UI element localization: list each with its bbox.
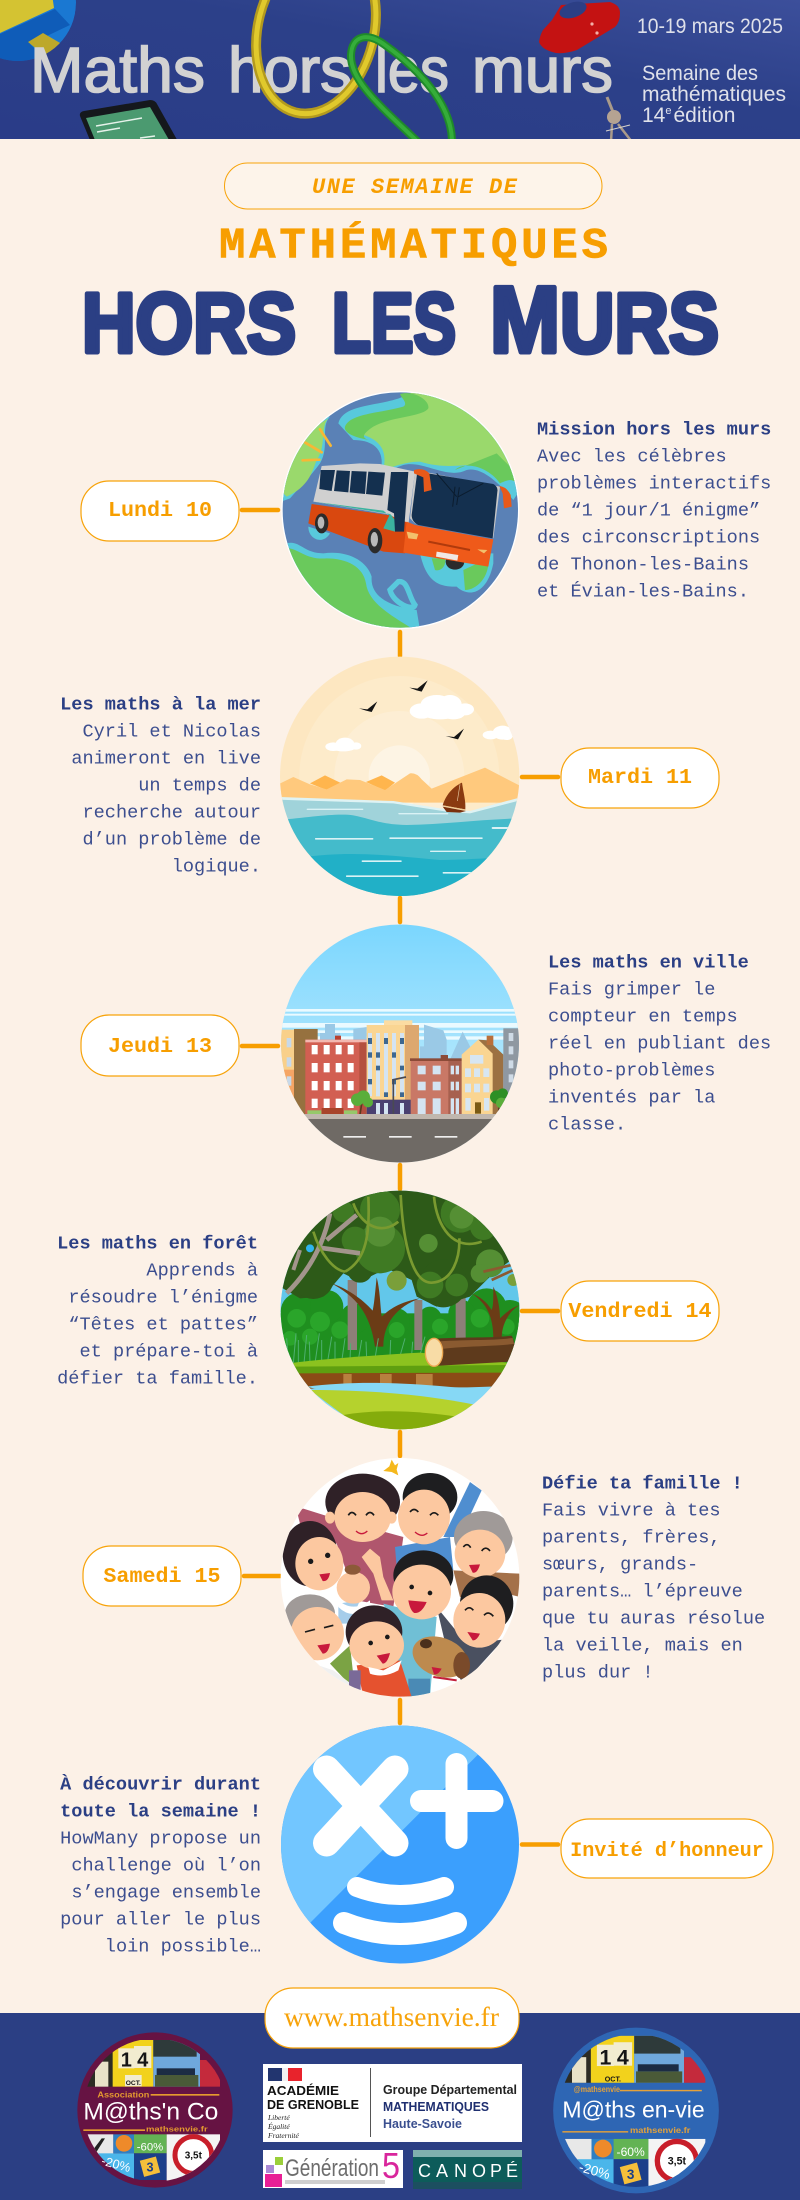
text: Défie ta famille: que tu auras résolue: [542, 1608, 765, 1629]
logo: Canopé: [413, 2150, 522, 2189]
text: À découvrir: challenge où l’on: [71, 1855, 261, 1876]
text: Mission hors les murs: Avec les célèbres: [537, 446, 727, 467]
pill: website: www.mathsenvie.fr: [284, 2002, 499, 2032]
logo: M@ths en-vie: 3,5t: [668, 2156, 687, 2168]
logo: M@ths en-vie: -60%: [617, 2145, 645, 2159]
pill: Lundi 10: [81, 481, 239, 541]
text: Les maths à la mer: [60, 694, 261, 877]
logo: Académie de Grenoble: ACADÉMIE: [267, 2083, 339, 2098]
logo: M@ths'n Co: OCT.: [126, 2080, 141, 2087]
icon: red cone: [539, 0, 620, 53]
pill: website: [265, 1988, 519, 2048]
pill: Invité d'honneur: Invité d’honneur: [570, 1840, 764, 1863]
text: Les maths à la mer: recherche autour: [82, 802, 261, 823]
logo: M@ths en-vie: M@ths en-vie: [562, 2097, 705, 2123]
logo: M@ths'n Co: 3,5t: [185, 2150, 203, 2161]
connector: Samedi: [244, 1574, 280, 1578]
pill: Jeudi 13: [81, 1015, 239, 1076]
text: À découvrir: [60, 1773, 261, 1957]
text: Défie ta famille: [542, 1473, 765, 1683]
pill: Samedi 15: Samedi 15: [103, 1564, 221, 1589]
pill: Invité d'honneur: [561, 1819, 773, 1878]
header banner: [0, 0, 800, 145]
heading: hors les murs: LES: [332, 276, 456, 370]
text: Les maths en ville: [548, 952, 771, 1135]
logo: M@ths'n Co: -60%: [137, 2142, 163, 2154]
icon: tablet: [80, 100, 176, 139]
footer band: [0, 1988, 800, 2200]
bus: [446, 560, 464, 570]
text: Les maths en ville: compteur en temps: [548, 1006, 738, 1027]
logo: Académie de Grenoble: MATHEMATIQUES: [383, 2099, 489, 2114]
illustration: sea at sunset: [278, 656, 522, 898]
icon: volleyball: [0, 0, 76, 62]
text: Les maths à la mer: un temps de: [138, 775, 261, 796]
title: Maths hors les murs: hors: [228, 34, 352, 106]
connector: Vendredi: [522, 1309, 558, 1313]
logo: M@ths en-vie: 4: [617, 2045, 629, 2069]
logo: M@ths en-vie: 3: [627, 2167, 635, 2182]
logo: M@ths'n Co: 4: [137, 2050, 148, 2072]
text: Défie ta famille: Défie ta famille !: [542, 1473, 743, 1494]
text: À découvrir: s’engage ensemble: [71, 1882, 261, 1903]
text: Les maths à la mer: d’un problème de: [82, 829, 261, 850]
logo: Académie de Grenoble: Groupe Départemental: [383, 2082, 517, 2097]
pill: Jeudi 13: Jeudi 13: [108, 1034, 212, 1059]
illustration: HowMany logo: [281, 1725, 519, 1964]
logo: Académie de Grenoble: Égalité: [267, 2121, 290, 2131]
logo: M@ths'n Co: -20%: [100, 2154, 132, 2175]
text: Défie ta famille: parents, frères,: [542, 1527, 721, 1548]
logo: M@ths'n Co: 3: [146, 2161, 154, 2175]
date and edition text: 14: [642, 104, 665, 127]
pill: une semaine de: [224, 163, 602, 209]
text: Mission hors les murs: [537, 419, 771, 602]
text: Mission hors les murs: des circonscriptions: [537, 527, 760, 548]
text: Les maths en ville: classe.: [548, 1114, 626, 1135]
text: Les maths à la mer: animeront en live: [71, 748, 261, 769]
row: Samedi 15: [83, 1457, 765, 1699]
pill: Vendredi 14: Vendredi 14: [568, 1299, 712, 1324]
logo: M@ths en-vie: OCT.: [605, 2075, 621, 2083]
text: Les maths en forêt: résoudre l’énigme: [68, 1287, 258, 1308]
date and edition text: Semaine des: [642, 62, 758, 85]
text: Les maths en ville: Les maths en ville: [548, 952, 749, 973]
text: Les maths en forêt: [57, 1233, 258, 1389]
text: À découvrir: loin possible…: [105, 1936, 261, 1957]
logo: M@ths en-vie: 1: [599, 2045, 611, 2069]
date and edition text: e: [665, 105, 671, 117]
title: Maths hors les murs: Maths: [30, 34, 205, 106]
text: Les maths en ville: réel en publiant des: [548, 1033, 771, 1054]
text: Les maths en ville: inventés par la: [548, 1087, 715, 1108]
logo: M@ths'n Co: M@ths'n Co: [83, 2098, 218, 2125]
text: Défie ta famille: sœurs, grands-: [542, 1554, 698, 1575]
row: Vendredi 14: [57, 1190, 719, 1433]
connector: Invité: [522, 1842, 558, 1847]
date and edition text: édition: [673, 104, 735, 127]
logo: Académie de Grenoble: Liberté: [267, 2113, 290, 2122]
logo: Canopé: CANOPÉ: [418, 2161, 518, 2181]
logo: M@ths en-vie: [553, 2028, 719, 2193]
pill: Mardi 11: Mardi 11: [588, 765, 692, 790]
text: À découvrir: À découvrir durant: [60, 1773, 261, 1795]
logo: M@ths'n Co: 1: [121, 2050, 132, 2072]
logo: Génération 5: Génération: [285, 2155, 379, 2182]
illustration: forest: [280, 1190, 527, 1433]
icon: compass: [606, 97, 632, 142]
date and edition text: [637, 15, 786, 127]
text: Les maths en forêt: défier ta famille.: [57, 1368, 258, 1389]
connector: Lundi: [242, 508, 278, 512]
text: Mission hors les murs: et Évian-les-Bains.: [537, 580, 749, 602]
text: Défie ta famille: la veille, mais en: [542, 1635, 743, 1656]
text: Défie ta famille: Fais vivre à tes: [542, 1500, 721, 1521]
logo: Génération 5: [263, 2145, 403, 2188]
date and edition text: mathématiques: [642, 83, 786, 106]
logo: Académie de Grenoble: Fraternité: [267, 2131, 299, 2140]
icon: green hoop: [351, 37, 452, 142]
logo: Académie de Grenoble: [263, 2064, 522, 2142]
connector: Jeudi: [242, 1044, 278, 1048]
pill: Vendredi 14: [561, 1281, 719, 1341]
text: Les maths en forêt: Apprends à: [146, 1260, 258, 1281]
text: Les maths en ville: photo-problèmes: [548, 1060, 715, 1081]
text: Mission hors les murs: de Thonon-les-Bains: [537, 554, 749, 575]
heading: hors les murs: [82, 267, 719, 372]
logo: Génération 5: 5: [382, 2145, 400, 2186]
text: Les maths en forêt: Les maths en forêt: [57, 1233, 258, 1254]
text: À découvrir: toute la semaine !: [60, 1801, 261, 1822]
title: Maths hors les murs: les: [375, 34, 449, 106]
heading: mathématiques: MATHÉMATIQUES: [219, 220, 608, 272]
text: Mission hors les murs: Mission hors les murs: [537, 419, 771, 440]
illustration: bus on globe: [277, 387, 523, 633]
logo: M@ths en-vie: mathsenvie.fr: [630, 2126, 690, 2135]
date and edition text: 10-19 mars 2025: [637, 15, 783, 38]
pill: Lundi 10: Lundi 10: [108, 498, 212, 523]
text: Les maths en forêt: et prépare-toi à: [79, 1341, 258, 1362]
connector: Mardi: [522, 775, 558, 779]
heading: hors les murs: MURS: [490, 267, 719, 372]
logo: M@ths'n Co: Association: [97, 2091, 149, 2100]
title: Maths hors les murs: [34, 44, 612, 94]
icon: yellow hoop: [251, 0, 381, 119]
text: Les maths à la mer: Cyril et Nicolas: [82, 721, 261, 742]
row: Mardi 11: [60, 656, 719, 898]
logo: M@ths en-vie: -20%: [577, 2160, 612, 2182]
logo: Académie de Grenoble: Haute-Savoie: [383, 2116, 462, 2131]
text: À découvrir: HowMany propose un: [60, 1828, 261, 1849]
text: Mission hors les murs: problèmes interactifs: [537, 473, 771, 494]
logo: M@ths'n Co: mathsenvie.fr: [146, 2125, 208, 2134]
row: Jeudi 13: [81, 923, 771, 1166]
text: Les maths à la mer: Les maths à la mer: [60, 694, 261, 715]
text: Défie ta famille: parents… l’épreuve: [542, 1581, 743, 1602]
pill: Mardi 11: [561, 748, 719, 808]
row: Invité d'honneur: [60, 1725, 773, 1964]
text: Les maths en ville: Fais grimper le: [548, 979, 715, 1000]
text: Mission hors les murs: de “1 jour/1 énigme”: [537, 500, 760, 521]
vertical connectors: [398, 632, 402, 1723]
text: Les maths à la mer: logique.: [172, 856, 261, 877]
logo: M@ths en-vie: @mathsenvie: [574, 2085, 621, 2094]
title: Maths hors les murs: murs: [472, 34, 613, 106]
logo: M@ths'n Co: [77, 2032, 233, 2188]
pill: Samedi 15: [83, 1546, 241, 1606]
heading: hors les murs: HORS: [82, 276, 296, 370]
logo: Académie de Grenoble: DE GRENOBLE: [267, 2097, 359, 2112]
illustration: city street: [280, 923, 522, 1166]
text: À découvrir: pour aller le plus: [60, 1909, 261, 1930]
text: Défie ta famille: plus dur !: [542, 1662, 654, 1683]
pill: une semaine de: UNE SEMAINE DE: [312, 175, 518, 200]
illustration: family: [280, 1457, 520, 1699]
row: Lundi 10: [81, 387, 771, 633]
text: Les maths en forêt: “Têtes et pattes”: [68, 1314, 258, 1335]
